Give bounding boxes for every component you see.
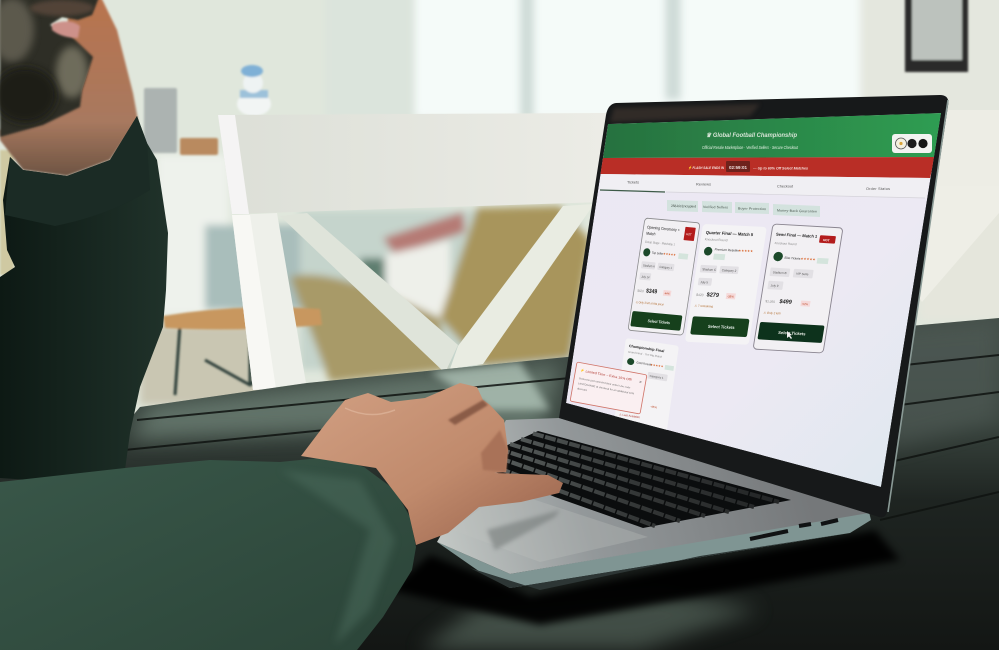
ticket card: quarter final: $420 <box>696 293 704 297</box>
base front edge <box>437 512 871 588</box>
finger reflection <box>487 510 560 550</box>
ticket card: championship final: Gold Resale <box>636 361 653 367</box>
finger gap shadow <box>448 400 488 425</box>
ticket card: semi final: $499 <box>779 299 792 306</box>
limited time popup: LASTCHANCE at checkout for an additional 10% <box>578 382 635 396</box>
ticket card: quarter final: Knockout Round <box>704 237 728 242</box>
wall picture frame <box>905 0 968 72</box>
ticket card: semi final: Select Tickets <box>778 330 807 336</box>
ticket card: semi final: ⚠ Only 2 left! <box>763 311 781 316</box>
wall speaker <box>144 88 177 153</box>
trust badges: Money-Back Guarantee <box>777 209 817 214</box>
base deck <box>437 418 869 574</box>
flash sale band <box>600 157 935 178</box>
ticket card: championship final: Championship Final <box>629 344 665 353</box>
tab bar <box>599 174 930 198</box>
limited time popup <box>570 362 647 414</box>
countdown <box>726 161 750 172</box>
flash sale offer: — Up to 60% Off Select Matches <box>752 166 809 170</box>
ticket card: opening ceremony: ★★★★★ <box>663 252 676 257</box>
ticket card: semi final: ★★★★★ <box>800 257 816 262</box>
tab bar: Order Status <box>866 187 890 191</box>
header subtitle: Official Resale Marketplace · Verified Sellers · Secure Checkout <box>702 145 799 150</box>
ticket card: opening ceremony: $620 <box>637 289 644 293</box>
ticket card: championship final: Category 1 <box>649 374 664 380</box>
ticket card: opening ceremony <box>628 218 700 335</box>
man's beard <box>0 0 100 137</box>
white chair <box>218 110 999 390</box>
ticket card: semi final: Elite Tickets <box>784 256 801 261</box>
ticket card: opening ceremony: Select Tickets <box>647 319 670 325</box>
ticket card: championship final: -45% <box>650 405 658 409</box>
lips <box>52 21 80 38</box>
ticket card: semi final: -52% <box>801 302 809 306</box>
ticket card: semi final: July 9 <box>770 283 779 288</box>
wooden box <box>180 138 218 155</box>
ticket card: semi final: $1,050 <box>765 299 776 304</box>
ticket card: opening ceremony: Category 1 <box>659 265 673 270</box>
countdown: 02:59:01 <box>729 165 747 170</box>
ticket card: semi final: Stadium B <box>773 270 787 275</box>
laptop base <box>437 418 871 590</box>
ticket card: semi final: Knockout Round <box>774 241 797 246</box>
limited time popup: discount. <box>577 387 588 392</box>
ticket card: championship final: ⚠ Last Available <box>619 412 641 419</box>
trackpad <box>452 490 648 562</box>
ticket card: opening ceremony: $349 <box>646 288 658 296</box>
ticket card: quarter final: -35% <box>727 294 735 299</box>
forearm fold highlights <box>280 470 395 645</box>
ticket card: quarter final: July 5 <box>700 280 709 285</box>
tan backrest seen left of sleeve <box>0 150 14 275</box>
ticket card: quarter final: Quarter Final — Match 5 <box>705 230 754 237</box>
ticket card: opening ceremony: July 14 <box>641 274 650 279</box>
ticket card: opening ceremony: HOT <box>686 232 692 237</box>
ticket card: quarter final: Category 2 <box>721 268 737 273</box>
limited time popup: Someone just canceled their order! Use code <box>579 377 631 390</box>
raised arm cuff <box>5 116 150 226</box>
limited time popup: × <box>639 379 643 385</box>
ticket card: quarter final: ⚠ 7 remaining <box>694 304 714 309</box>
ticket card: opening ceremony: Top Seller <box>652 251 664 256</box>
ticket card: quarter final <box>685 224 767 345</box>
language badges <box>892 134 932 153</box>
trust badges: 256-bit Encrypted <box>671 204 696 209</box>
room background <box>140 0 999 405</box>
ticket card: opening ceremony: ⚠ Only 3 left at this price! <box>635 300 664 307</box>
ticket card: championship final <box>615 338 678 430</box>
ticket card: opening ceremony: Stadium A <box>643 263 655 269</box>
raised arm sleeve <box>0 116 168 482</box>
ticket card: semi final <box>753 224 843 353</box>
ticket card: quarter final: Premium Reseller <box>714 247 739 253</box>
header green band <box>603 113 941 158</box>
trust badges: Buyer Protection <box>738 207 766 211</box>
man's hand at head <box>0 0 138 176</box>
screen <box>566 113 941 487</box>
ports <box>750 520 838 539</box>
keyboard <box>471 431 791 528</box>
flash sale text: ⚡ FLASH SALE ENDS IN <box>688 165 724 170</box>
ticket card: quarter final: Stadium C <box>702 267 717 272</box>
limited time popup: ⚡ Limited Time – Extra 10% Off! <box>580 368 632 382</box>
ticket card: quarter final: $279 <box>706 292 719 299</box>
header title: ♛ Global Football Championship <box>706 132 797 139</box>
ticket card: opening ceremony: Group Stage · Matchday 1 <box>645 240 676 247</box>
ticket card: semi final: HOT <box>823 238 830 242</box>
ticket card: quarter final: Select Tickets <box>708 324 736 330</box>
laptop lid <box>559 95 948 517</box>
man's typing hand <box>301 383 563 545</box>
ticket card: opening ceremony: Match <box>646 231 656 237</box>
tab bar: Checkout <box>777 184 794 188</box>
snowman figurine <box>237 65 271 116</box>
trust badges <box>667 200 820 217</box>
wooden table <box>0 318 999 650</box>
stool <box>163 307 322 395</box>
table sheen <box>125 320 999 650</box>
ticket card: semi final: VIP Suite <box>796 272 809 276</box>
mouse cursor <box>787 331 792 339</box>
room wall <box>0 0 999 420</box>
ticket card: opening ceremony: -44% <box>664 291 671 296</box>
ticket card: championship final: ★★★★★ <box>650 363 664 368</box>
trust badges: Verified Sellers <box>703 205 728 210</box>
ticket card: championship final: Grand Final · The Big Match <box>628 350 663 359</box>
forearm sleeve <box>0 457 416 650</box>
ticket card: quarter final: ★★★★★ <box>738 249 753 253</box>
ticket card: semi final: Semi Final — Match 1 <box>776 232 818 239</box>
tab bar: Tickets <box>627 180 639 184</box>
tab bar: Reviews <box>696 182 711 186</box>
ticket card: opening ceremony: Opening Ceremony + <box>647 225 681 233</box>
